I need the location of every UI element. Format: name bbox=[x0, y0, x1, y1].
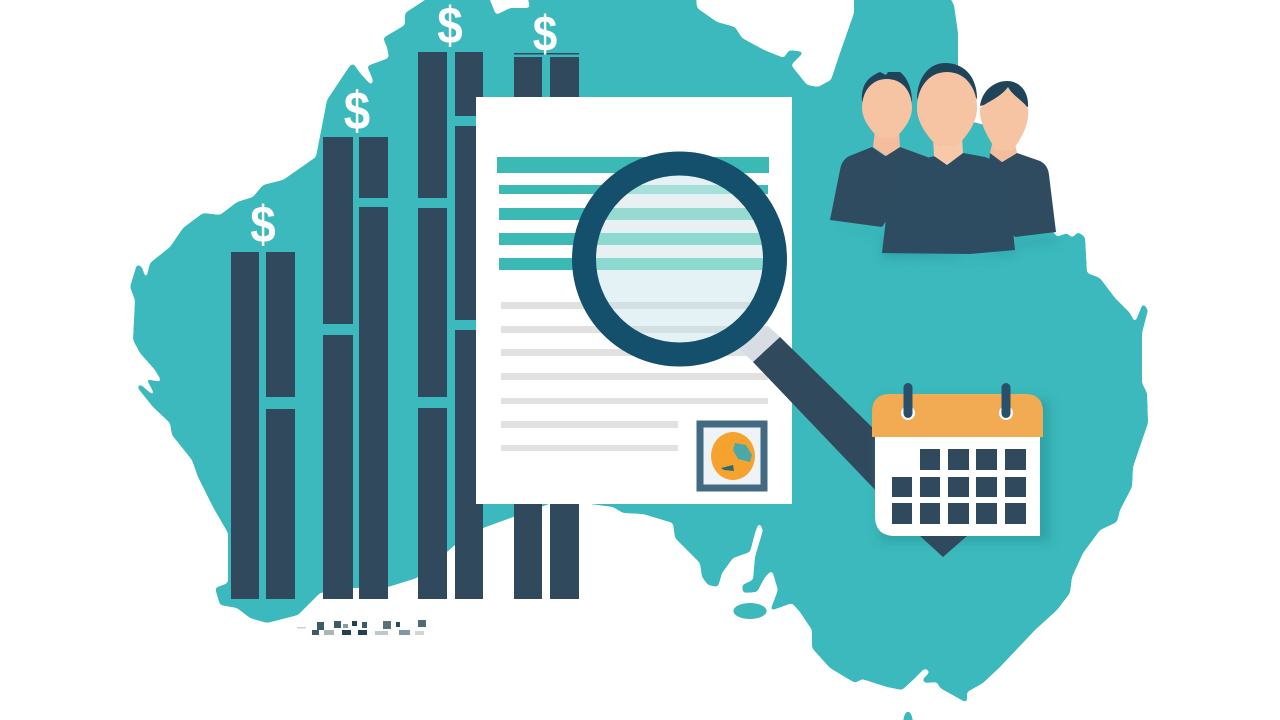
date grid bbox=[892, 449, 1026, 524]
calendar body bbox=[875, 437, 1040, 536]
document bbox=[476, 97, 792, 504]
ring bbox=[584, 164, 775, 354]
stamp bbox=[700, 424, 764, 488]
dollar signs bbox=[250, 0, 557, 254]
mainland bbox=[130, 0, 1148, 703]
infographic canvas bbox=[130, 0, 1148, 720]
binder rings bbox=[901, 383, 1013, 420]
blurred caption bbox=[297, 620, 426, 635]
people shadow bbox=[832, 222, 1056, 259]
Kangaroo Island bbox=[733, 603, 767, 619]
calendar bbox=[872, 383, 1050, 557]
people group bbox=[830, 63, 1056, 259]
bar group 2 bbox=[323, 137, 388, 599]
calendar header bbox=[872, 394, 1043, 437]
handle bbox=[753, 337, 880, 495]
neck bbox=[738, 326, 780, 362]
bar group 4 bbox=[514, 53, 579, 599]
dollar sign 1: $ bbox=[250, 196, 276, 254]
bar group 1 bbox=[231, 252, 295, 599]
map of Australia bbox=[130, 0, 1148, 720]
grey text lines bbox=[501, 302, 768, 451]
dollar sign 2: $ bbox=[344, 80, 370, 141]
bar chart bbox=[231, 52, 579, 599]
magnifying glass bbox=[584, 164, 880, 495]
teal text lines bbox=[497, 157, 769, 270]
lens bbox=[596, 176, 763, 342]
person centre bbox=[882, 63, 1015, 254]
person right bbox=[980, 81, 1056, 237]
dollar sign 4: $ bbox=[533, 5, 557, 62]
pointer bbox=[920, 536, 967, 557]
calendar shadow bbox=[880, 400, 1050, 542]
bar group 3 bbox=[418, 52, 483, 599]
paper bbox=[476, 97, 792, 504]
Tasmania bbox=[903, 711, 913, 720]
person left bbox=[830, 72, 930, 227]
